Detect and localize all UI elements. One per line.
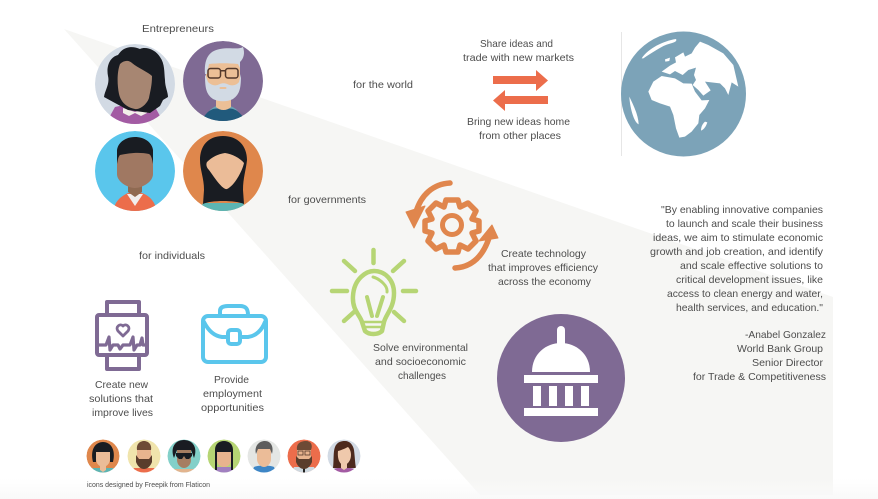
label: for individuals: for individuals: [139, 250, 205, 262]
label: for the world: for the world: [353, 79, 413, 91]
icon: exchange arrows: [493, 70, 548, 111]
text: solve environmental: [373, 342, 468, 382]
text: provide employment: employment: [203, 388, 262, 400]
small avatar 5: [248, 440, 280, 474]
text: create new solutions: [89, 379, 153, 419]
quote: "By enabling innovative companies: [661, 204, 823, 216]
avatar: older man with glasses: [183, 41, 263, 125]
icon: briefcase: [203, 306, 266, 362]
text: bring new ideas: [467, 116, 570, 142]
icon: gear with rotating arrows: [406, 183, 498, 268]
attribution: [693, 329, 826, 383]
text: provide employment: opportunities: [201, 402, 264, 414]
text: provide employment: [201, 374, 264, 414]
small avatar 1: [86, 440, 120, 474]
bottom fade band: [0, 478, 878, 499]
quote: to launch and scale their business: [666, 218, 823, 230]
attribution: Senior Director: [752, 357, 824, 369]
quote: health services, and education.": [676, 302, 823, 314]
text: provide employment: Provide: [214, 374, 249, 386]
quote: growth and job creation, and identify: [650, 246, 824, 258]
label: for governments: for governments: [288, 194, 366, 206]
icon: smartwatch with heart: [97, 302, 147, 369]
text: create technology: [488, 248, 599, 288]
text: bring new ideas: from other places: [479, 130, 561, 142]
text: create technology: Create technology: [501, 248, 587, 260]
text: bring new ideas: Bring new ideas home: [467, 116, 570, 128]
small avatar 2: [128, 440, 160, 474]
text: create new solutions: Create new: [95, 379, 148, 391]
text: create technology: that improves efficiency: [488, 262, 599, 274]
quote: and scale effective solutions to: [680, 260, 823, 272]
small avatar 7: [328, 440, 360, 474]
text: create new solutions: solutions that: [89, 393, 153, 405]
row of small avatars: [86, 440, 360, 474]
heading: Entrepreneurs: Entrepreneurs: [142, 23, 214, 35]
text: share ideas: Share ideas and: [480, 38, 553, 50]
avatar: young man on blue: [95, 131, 175, 212]
avatar: woman with dark curly hair: [95, 44, 175, 125]
quote: access to clean energy and water,: [667, 288, 823, 300]
attribution: World Bank Group: [737, 343, 823, 355]
credit line: icons designed by Freepik from Flaticon: [87, 482, 210, 489]
text: create new solutions: improve lives: [92, 407, 153, 419]
icon: globe: [621, 32, 746, 156]
text: solve environmental: challenges: [398, 370, 446, 382]
avatar: woman wearing hijab: [183, 131, 263, 213]
small avatar 4: [208, 440, 240, 474]
attribution: -Anabel Gonzalez: [745, 329, 826, 341]
icon: government building: [497, 314, 625, 442]
text: create technology: across the economy: [498, 276, 592, 288]
text: solve environmental: Solve environmental: [373, 342, 468, 354]
quote: critical development issues, like: [676, 274, 823, 286]
text: share ideas: trade with new markets: [463, 52, 574, 64]
text: share ideas: [463, 38, 574, 64]
icon: light bulb: [332, 250, 416, 334]
small avatar 3: [168, 440, 200, 474]
quote: [650, 204, 824, 314]
text: solve environmental: and socioeconomic: [375, 356, 466, 368]
attribution: for Trade & Competitiveness: [693, 371, 826, 383]
quote: ideas, we aim to stimulate economic: [653, 232, 823, 244]
small avatar 6: [288, 440, 320, 474]
